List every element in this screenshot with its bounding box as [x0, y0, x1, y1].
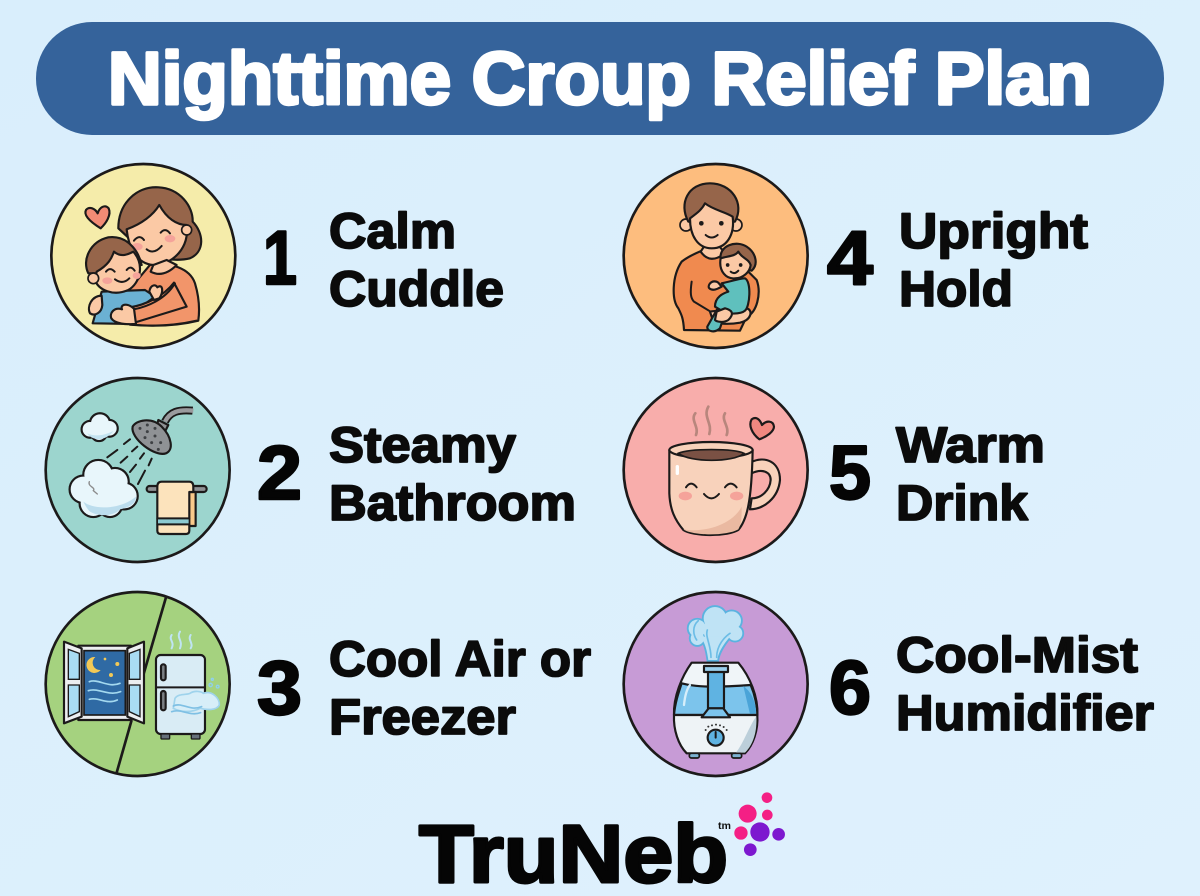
panel: step 4 upright hold: [624, 164, 1088, 348]
label: cool air or freezer: Cool Air or: [329, 631, 591, 687]
icon: mother cuddling child: [51, 164, 235, 348]
number 3: 3: [257, 646, 302, 731]
label: steamy bathroom: [329, 417, 576, 531]
icon: smiling mug: [624, 378, 808, 562]
label: cool air or freezer: [329, 631, 591, 745]
label: warm drink: [896, 417, 1045, 531]
number 4: 4: [827, 216, 873, 301]
number 2: 2: [257, 431, 302, 516]
label: cool-mist humidifier: Humidifier: [896, 685, 1154, 741]
label: cool-mist humidifier: [896, 627, 1154, 741]
logo: TruNeb: [419, 792, 785, 896]
panel: step 1 calm cuddle: [51, 164, 504, 348]
icon: large steam cloud: [71, 461, 137, 516]
trademark: tm: [718, 821, 731, 832]
panel: step 6 cool-mist humidifier: [624, 592, 1154, 776]
number 1: 1: [263, 216, 297, 301]
label: upright hold: Hold: [899, 261, 1013, 317]
label: steamy bathroom: Bathroom: [329, 475, 576, 531]
label: warm drink: Warm: [896, 417, 1045, 473]
label: warm drink: Drink: [896, 475, 1028, 531]
label: calm cuddle: Calm: [329, 203, 456, 259]
label: upright hold: Upright: [899, 203, 1088, 259]
label: steamy bathroom: Steamy: [329, 417, 516, 473]
label: calm cuddle: Cuddle: [329, 261, 504, 317]
icon: logo dots: [734, 792, 785, 856]
icon: open night window and fridge: [46, 592, 230, 776]
icon: shower, steam and towel: [46, 378, 230, 562]
panel: step 2 steamy bathroom: [46, 378, 576, 562]
title banner: [36, 22, 1164, 135]
icon: mist plume: [689, 607, 742, 660]
icon: small steam cloud: [83, 414, 117, 440]
label: upright hold: [899, 203, 1088, 317]
label: cool air or freezer: Freezer: [329, 689, 516, 745]
icon: parent holding baby upright: [624, 164, 808, 348]
title: Nighttime Croup Relief Plan: [108, 37, 1092, 120]
panel: step 3 cool air or freezer: [46, 592, 591, 776]
label: calm cuddle: [329, 203, 504, 317]
panel: step 5 warm drink: [624, 378, 1045, 562]
number 5: 5: [829, 431, 871, 516]
icon: humidifier with mist: [624, 592, 808, 776]
label: cool-mist humidifier: Cool-Mist: [896, 627, 1138, 683]
number 6: 6: [829, 646, 871, 731]
